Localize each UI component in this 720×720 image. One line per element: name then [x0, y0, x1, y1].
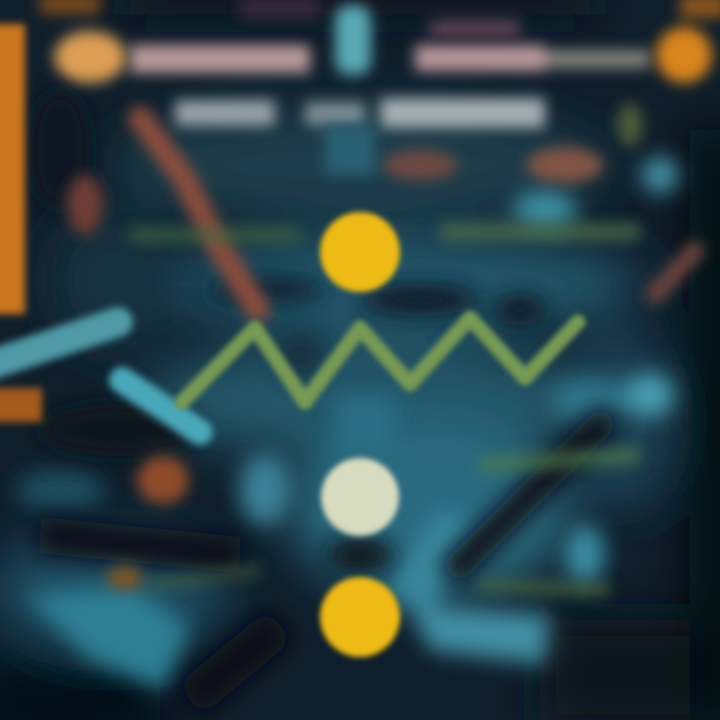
- chart: green zig-zag line: [182, 318, 578, 402]
- chart: orange left pillar: [0, 24, 42, 422]
- chart: teal segment: [122, 380, 200, 432]
- heading: blurred title bars: [130, 45, 650, 128]
- dark chart shapes: [30, 90, 610, 700]
- icon: pale circle middle: [321, 458, 399, 536]
- chart: teal rising bar: [0, 322, 118, 365]
- icon: top corner orange glows: [40, 0, 720, 83]
- icon: yellow circle top: [320, 212, 400, 292]
- chart: faint olive horizontal band: [130, 232, 640, 590]
- panel: teal lower fan: [15, 157, 678, 690]
- icon: yellow circle bottom: [320, 577, 400, 657]
- icon: top teal column: [325, 5, 375, 175]
- chart: red-brown declining line: [67, 103, 700, 590]
